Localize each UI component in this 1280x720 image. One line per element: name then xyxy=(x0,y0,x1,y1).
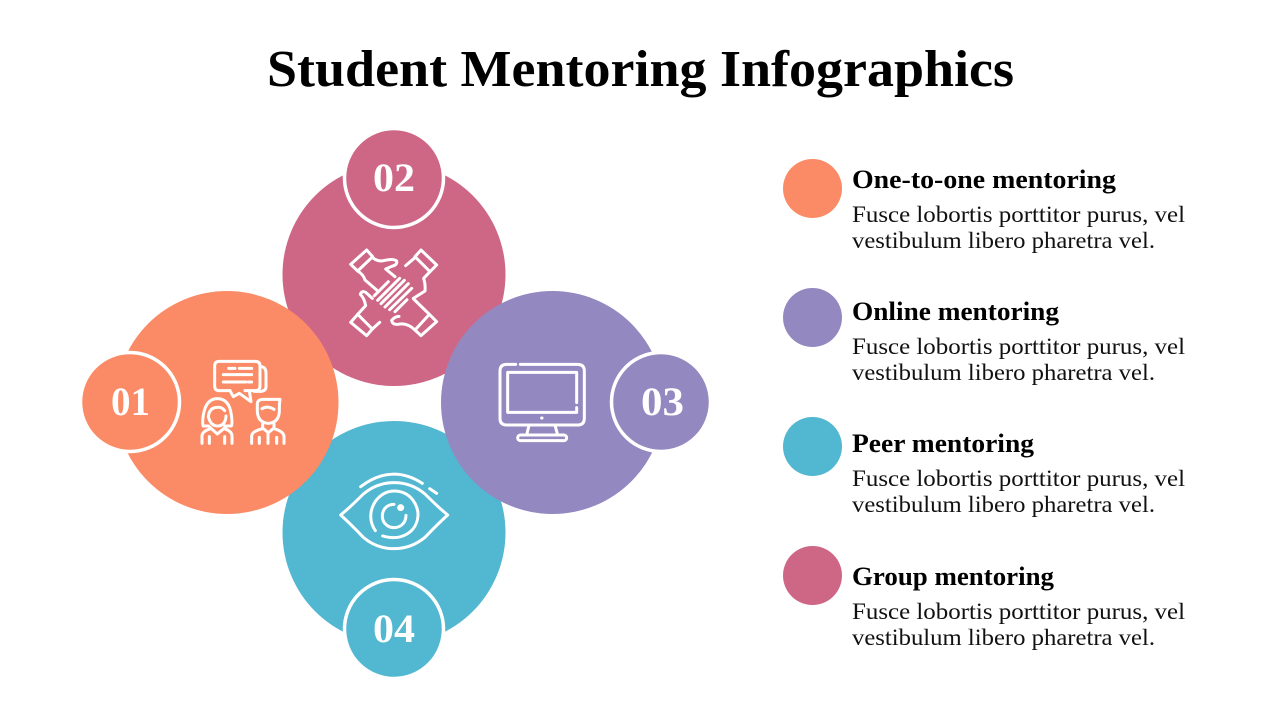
legend item: online mentoring xyxy=(783,288,1185,386)
badge 02 xyxy=(344,128,444,228)
legend item: group mentoring xyxy=(783,546,1185,651)
legend item: group mentoring: vestibulum libero pharetra vel. xyxy=(852,625,1155,651)
diagram: four overlapping mentoring circles xyxy=(80,128,710,678)
badge 03: 03 xyxy=(641,379,684,424)
legend item: group mentoring: Fusce lobortis porttitor purus, vel xyxy=(852,599,1185,625)
circle: peer mentoring, blue xyxy=(282,421,506,644)
badge 04 xyxy=(344,580,444,678)
icon: computer monitor xyxy=(500,364,584,441)
legend item: peer mentoring xyxy=(783,417,1185,518)
legend item: one-to-one mentoring: One-to-one mentoring xyxy=(852,165,1116,194)
legend item: online mentoring: Online mentoring xyxy=(852,297,1059,326)
legend item: peer mentoring: Peer mentoring xyxy=(852,429,1034,458)
badge 01 xyxy=(80,352,180,452)
icon: eye xyxy=(341,474,448,549)
legend item: group mentoring: Group mentoring xyxy=(852,562,1054,591)
legend item: one-to-one mentoring xyxy=(783,159,1185,254)
title: Student Mentoring Infographics xyxy=(267,41,1014,98)
badge 04: 04 xyxy=(373,606,415,651)
badge 02: 02 xyxy=(373,155,415,200)
badge 01: 01 xyxy=(111,379,150,424)
legend item: peer mentoring: vestibulum libero pharetra vel. xyxy=(852,492,1155,518)
circle: group mentoring, pink xyxy=(282,163,506,386)
legend item: online mentoring: Fusce lobortis porttitor purus, vel xyxy=(852,334,1185,360)
circle: online mentoring, purple xyxy=(441,291,664,514)
circle: one-to-one mentoring, orange xyxy=(116,291,338,514)
icon: four hands joined xyxy=(351,250,437,336)
legend xyxy=(783,159,1185,651)
legend item: one-to-one mentoring: vestibulum libero pharetra vel. xyxy=(852,228,1155,254)
legend item: one-to-one mentoring: Fusce lobortis porttitor purus, vel xyxy=(852,202,1185,228)
badge 03 xyxy=(612,352,710,452)
legend item: online mentoring: vestibulum libero pharetra vel. xyxy=(852,360,1155,386)
legend item: peer mentoring: Fusce lobortis porttitor purus, vel xyxy=(852,466,1185,492)
icon: mentor and student talking xyxy=(202,361,284,443)
